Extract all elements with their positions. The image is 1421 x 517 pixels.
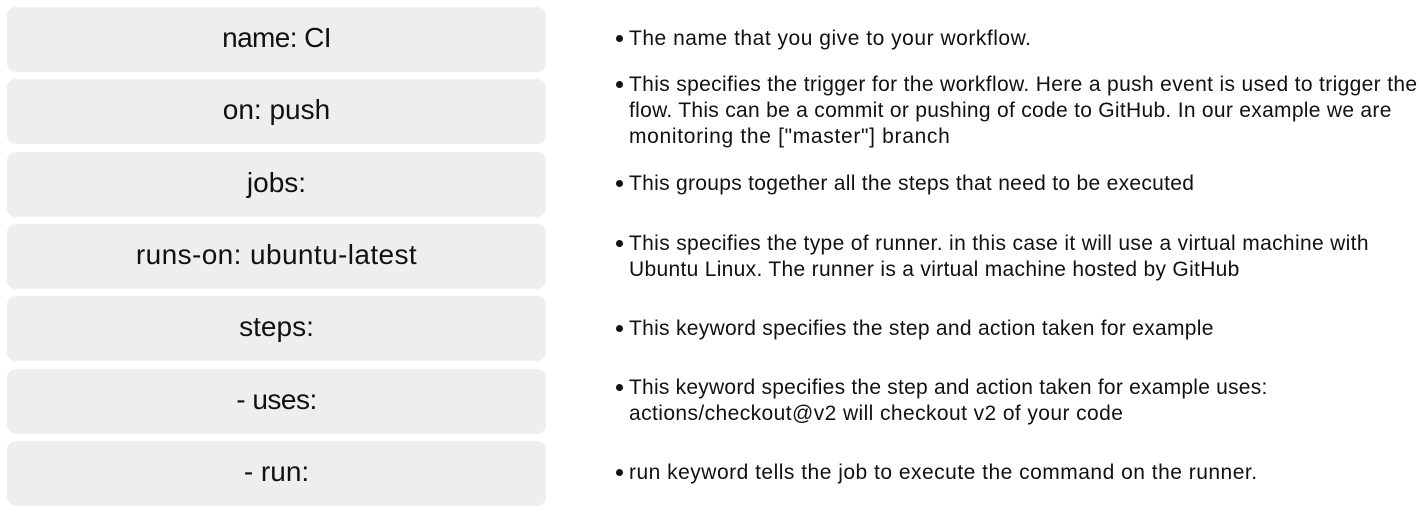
panel: keyword boxes <box>7 7 546 506</box>
keyword: on <box>7 79 546 144</box>
description: steps: This keyword specifies the step and action taken for example <box>629 317 1214 340</box>
keyword: run <box>7 441 546 506</box>
description: runs-on: This specifies the type of runner. in this case it will use a virtual machine with <box>629 232 1369 255</box>
keyword: steps <box>7 296 546 361</box>
description: uses <box>629 375 1268 427</box>
keyword: name: name: CI <box>222 22 331 53</box>
description: on: flow. This can be a commit or pushing of code to GitHub. In our example we are <box>629 99 1392 122</box>
description: runs-on: Ubuntu Linux. The runner is a virtual machine hosted by GitHub <box>629 258 1240 281</box>
keyword: steps: steps: <box>239 311 314 342</box>
description: runs-on <box>629 231 1369 283</box>
keyword: jobs: jobs: <box>247 167 306 198</box>
keyword: jobs <box>7 152 546 217</box>
keyword: uses <box>7 369 546 434</box>
keyword: runs-on <box>7 224 546 289</box>
description: on <box>629 72 1417 150</box>
keyword: uses: - uses: <box>236 384 317 415</box>
description: on: monitoring the ["master"] branch <box>629 125 950 148</box>
keyword: runs-on: runs-on: ubuntu-latest <box>136 239 417 270</box>
keyword: on: on: push <box>223 94 330 125</box>
description: uses: This keyword specifies the step and action taken for example uses: <box>629 376 1268 399</box>
keyword: run: - run: <box>244 456 309 487</box>
description: run: run keyword tells the job to execute the command on the runner. <box>629 461 1258 484</box>
keyword: name <box>7 7 546 72</box>
panel: descriptions <box>616 27 1417 484</box>
description: on: This specifies the trigger for the workflow. Here a push event is used to trigger the <box>629 73 1417 96</box>
description: name: The name that you give to your workflow. <box>629 27 1032 50</box>
description: uses: actions/checkout@v2 will checkout v2 of your code <box>629 402 1123 425</box>
description: jobs: This groups together all the steps that need to be executed <box>629 172 1194 195</box>
